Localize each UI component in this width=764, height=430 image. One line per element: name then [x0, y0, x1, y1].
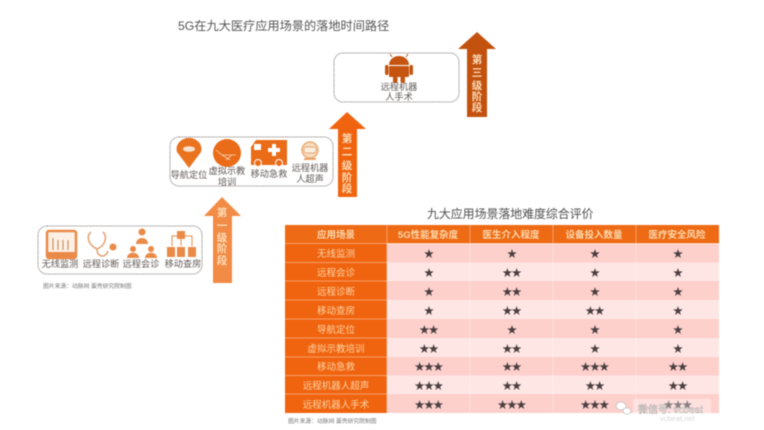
- row: wireless monitoring: 无线监测: [317, 248, 355, 260]
- icon: robot ultrasound head: [302, 142, 318, 160]
- row: remote consultation: ★★: [502, 265, 522, 280]
- watermark: vcbeat.net: [660, 414, 696, 423]
- row: navigation: 导航定位: [317, 324, 355, 336]
- source note: table: 图片来源：动脉网 蛋壳研究院制图: [288, 417, 377, 425]
- arrow: stage 3: 阶: [472, 90, 483, 103]
- arrow: stage 1: 第: [217, 206, 228, 219]
- row: navigation: ★: [506, 322, 517, 337]
- row: mobile first aid: [317, 359, 688, 374]
- arrow: stage 3: 第: [472, 53, 483, 66]
- row: wireless monitoring: ★: [423, 246, 434, 261]
- table header row: 设备投入数量: [565, 229, 623, 241]
- row: remote robotic ultrasound: [303, 378, 688, 393]
- row: remote robotic ultrasound: 远程机器人超声: [303, 380, 369, 392]
- row: remote robotic ultrasound: ★★★: [414, 378, 444, 393]
- label: remote robotic ultrasound: 远程机器: [292, 163, 328, 173]
- row: remote diagnosis: ★★: [502, 284, 522, 299]
- panel: stage 1 applications: [38, 226, 202, 274]
- row: wireless monitoring: [317, 246, 683, 261]
- arrow: stage 3: 级: [472, 79, 483, 92]
- row: virtual training: [307, 341, 683, 356]
- label: virtual training: 培训: [218, 176, 236, 187]
- arrow: stage 2: 二: [342, 146, 352, 158]
- row: mobile first aid: ★★★: [580, 359, 610, 374]
- row: wireless monitoring: ★: [672, 246, 683, 261]
- row: mobile first aid: 移动急救: [317, 361, 355, 373]
- label: remote robotic surgery: 远程机器: [381, 82, 417, 92]
- watermark: [616, 399, 711, 423]
- table: difficulty evaluation: [285, 225, 719, 413]
- arrow: stage 1: 阶: [217, 242, 228, 255]
- row: navigation: [317, 322, 683, 337]
- row: mobile first aid: ★★★: [414, 359, 444, 374]
- row: remote diagnosis: ★: [423, 284, 434, 299]
- icon: ambulance: [251, 140, 287, 166]
- label: mobile first aid: 移动急救: [251, 168, 287, 179]
- label: remote robotic surgery: 人手术: [385, 91, 413, 102]
- icon: stretcher training: [213, 139, 241, 167]
- row: virtual training: ★: [589, 341, 600, 356]
- row: remote consultation: ★: [672, 265, 683, 280]
- source note: left: 图片来源：动脉网 蛋壳研究院制图: [43, 282, 132, 290]
- row: remote robotic surgery: [303, 397, 693, 412]
- table title: 九大应用场景落地难度综合评价: [427, 207, 594, 221]
- row: mobile ward round: ★: [423, 303, 434, 318]
- row: navigation: ★: [589, 322, 600, 337]
- arrow: stage 1: 一: [217, 220, 228, 232]
- row: remote robotic ultrasound: ★★: [502, 378, 522, 393]
- row: remote robotic surgery: 远程机器人手术: [303, 399, 370, 411]
- watermark: 微信号: vcbeat: [638, 403, 703, 416]
- row: remote robotic surgery: ★★★: [497, 397, 527, 412]
- arrow: stage 1: [204, 197, 241, 283]
- table header row: [317, 229, 706, 241]
- row: wireless monitoring: ★: [506, 246, 517, 261]
- row: virtual training: 虚拟示教培训: [307, 343, 365, 355]
- icon: remote consultation people: [127, 228, 157, 258]
- icon: hierarchy ward round: [167, 231, 196, 257]
- label: remote consultation: 远程会诊: [123, 258, 159, 269]
- icon: wireless monitor: [47, 231, 76, 258]
- row: mobile first aid: ★★: [502, 359, 522, 374]
- row: mobile ward round: [317, 303, 683, 318]
- label: remote diagnosis: 远程诊断: [83, 258, 119, 269]
- arrow: stage 2: 第: [342, 132, 353, 145]
- row: mobile ward round: ★: [672, 303, 683, 318]
- row: remote consultation: [317, 265, 683, 280]
- row: remote robotic surgery: ★★★: [580, 397, 610, 412]
- row: remote diagnosis: [317, 284, 683, 299]
- table header row: 医疗安全风险: [648, 229, 706, 241]
- arrow: stage 2: 级: [342, 159, 353, 172]
- row: remote robotic surgery: ★★★: [663, 397, 693, 412]
- arrow: stage 3: 段: [472, 101, 483, 114]
- row: navigation: ★★: [419, 322, 439, 337]
- label: wireless monitoring: 无线监测: [42, 258, 78, 269]
- row: virtual training: ★★: [419, 341, 439, 356]
- label: remote robotic ultrasound: 人超声: [296, 173, 324, 184]
- row: remote robotic ultrasound: ★★: [668, 378, 688, 393]
- icon: stethoscope: [88, 232, 116, 256]
- arrow: stage 2: 阶: [342, 171, 353, 184]
- arrow: stage 3: 三: [472, 67, 482, 79]
- row: wireless monitoring: ★: [589, 246, 600, 261]
- panel: stage 2 applications: [170, 137, 333, 187]
- row: virtual training: ★: [672, 341, 683, 356]
- row: virtual training: ★★: [502, 341, 522, 356]
- label: mobile ward round: 移动查房: [165, 258, 201, 269]
- row: remote consultation: ★: [423, 265, 434, 280]
- arrow: stage 1: 级: [217, 231, 228, 244]
- row: mobile ward round: ★★: [502, 303, 522, 318]
- row: remote robotic surgery: ★★★: [414, 397, 444, 412]
- arrow: stage 2: 段: [342, 182, 353, 195]
- icon: navigation pin: [176, 138, 202, 168]
- table header row: 应用场景: [317, 229, 355, 241]
- arrow: stage 3: [458, 32, 496, 117]
- arrow: stage 2: [329, 112, 366, 197]
- icon: android robot: [385, 54, 413, 83]
- row: remote robotic ultrasound: ★★: [585, 378, 605, 393]
- row: mobile first aid: ★★: [668, 359, 688, 374]
- label: navigation: 导航定位: [171, 169, 207, 180]
- row: remote diagnosis: 远程诊断: [317, 286, 355, 298]
- arrow: stage 1: 段: [217, 254, 228, 267]
- row: remote consultation: ★: [589, 265, 600, 280]
- label: virtual training: 虚拟示教: [209, 166, 245, 176]
- row: remote diagnosis: ★: [672, 284, 683, 299]
- row: navigation: ★: [672, 322, 683, 337]
- row: mobile ward round: 移动查房: [317, 305, 355, 317]
- title: 5G在九大医疗应用场景的落地时间路径: [178, 18, 389, 33]
- row: mobile ward round: ★★: [585, 303, 605, 318]
- panel: stage 3 applications: [334, 53, 459, 102]
- row: remote consultation: 远程会诊: [317, 267, 355, 279]
- table header row: 医生介入程度: [482, 229, 540, 241]
- row: remote diagnosis: ★: [589, 284, 600, 299]
- table header row: 5G性能复杂度: [398, 229, 459, 241]
